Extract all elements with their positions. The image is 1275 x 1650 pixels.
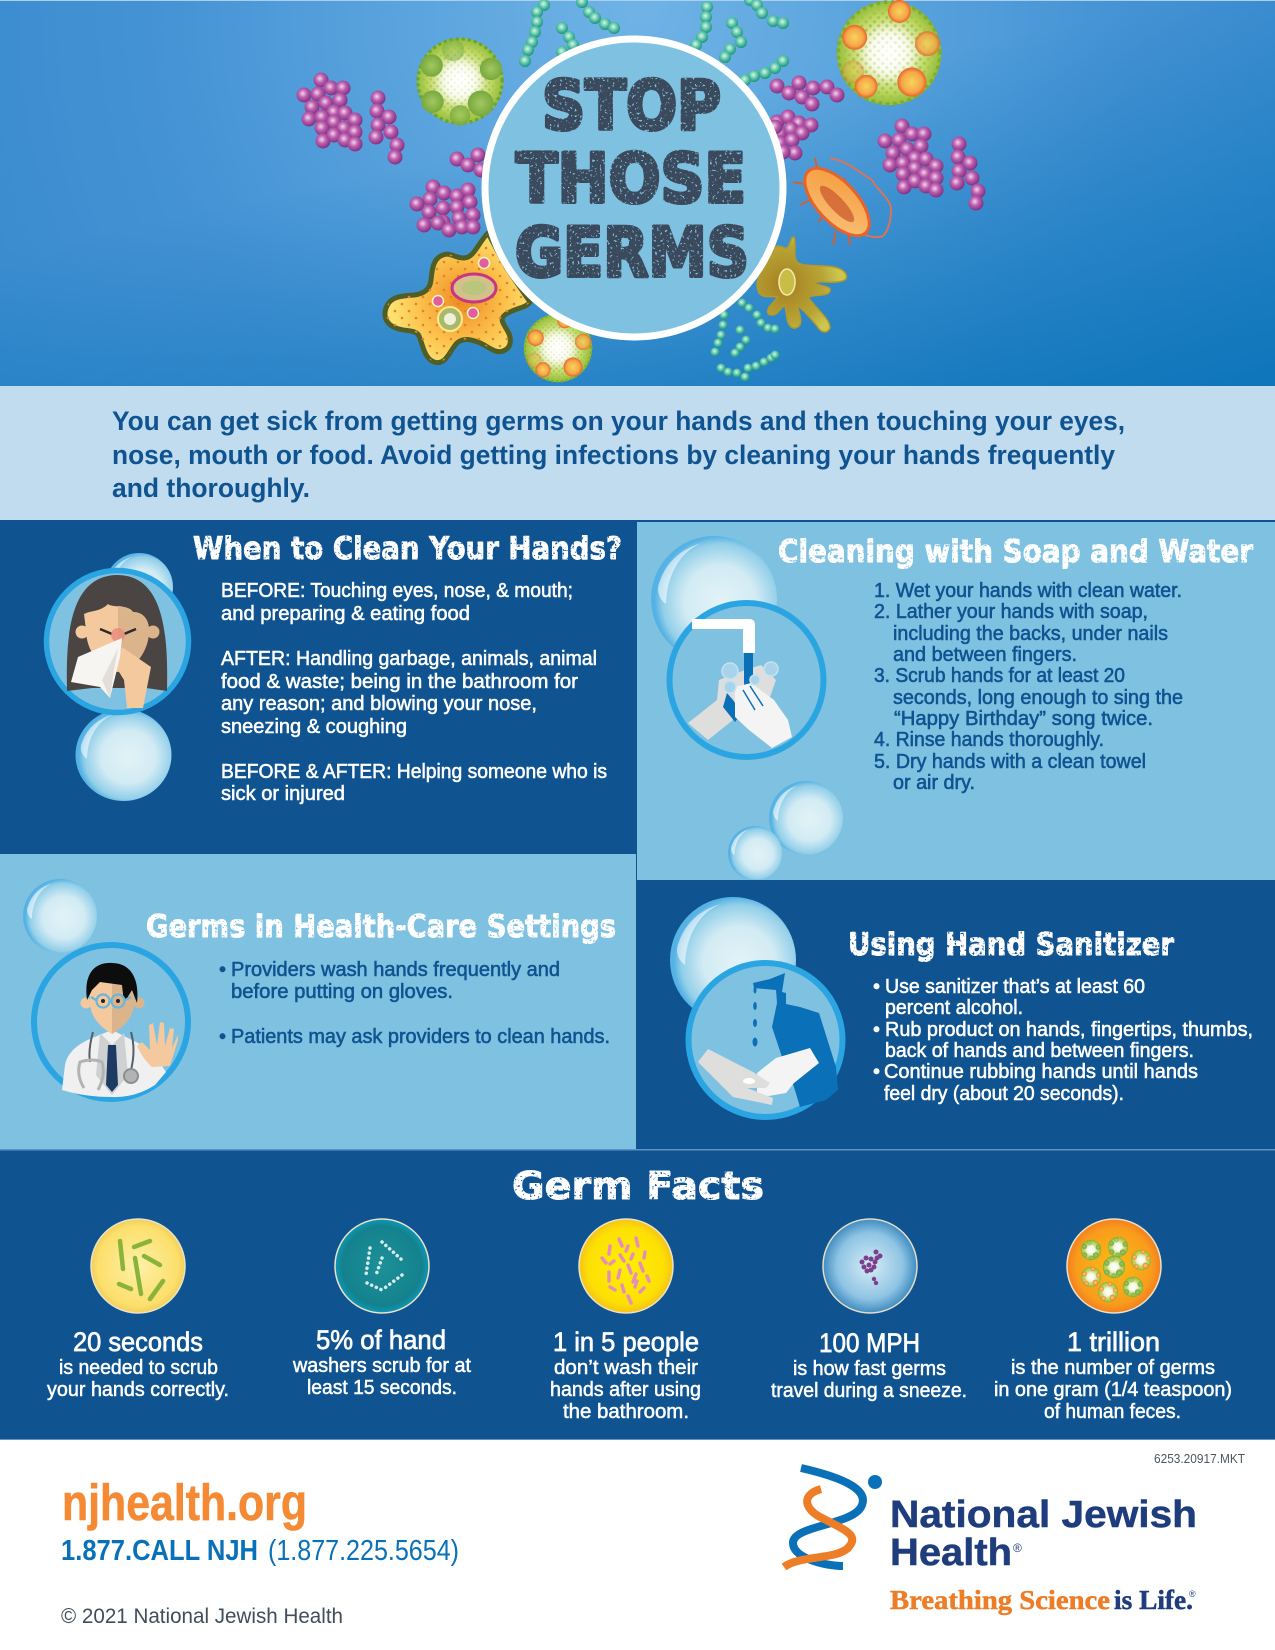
fact text: of human feces.	[1044, 1401, 1181, 1423]
germ: purple cocci clusters left and right	[296, 72, 986, 210]
text: when to clean: sneezing & coughing	[221, 716, 407, 738]
text: when to clean: AFTER: Handling garbage, animals, animal	[221, 648, 597, 670]
text: health-care bullets: •	[219, 959, 226, 981]
fact text: 20 seconds	[73, 1327, 203, 1357]
logo wordmark: ®	[1013, 1541, 1022, 1555]
text: health-care bullets: Providers wash hands frequently and	[231, 959, 560, 981]
icon: woman sneezing into tissue	[46, 570, 188, 712]
text: soap steps: 4. Rinse hands thoroughly.	[874, 729, 1104, 751]
petri dish: yellow with green rods	[91, 1219, 185, 1313]
text: soap steps: seconds, long enough to sing the	[893, 687, 1183, 709]
text: sanitizer bullets: Use sanitizer that’s at least 60	[885, 976, 1145, 998]
fact 5	[994, 1219, 1232, 1423]
title text: STOP	[542, 67, 721, 146]
germ: green virus sphere top left	[417, 38, 503, 126]
intro band	[0, 386, 1275, 521]
panel: germs in health-care settings	[0, 854, 636, 1150]
icon: doctor with stethoscope	[34, 945, 188, 1099]
text: soap steps: and between fingers.	[893, 644, 1077, 666]
text: health-care bullets: •	[219, 1026, 226, 1048]
fact text: the bathroom.	[563, 1401, 689, 1423]
text: when to clean: BEFORE & AFTER: Helping someone who is	[221, 761, 607, 783]
logo wordmark: Health	[890, 1532, 1012, 1574]
fact 4	[771, 1219, 967, 1402]
text: health-care bullets: Patients may ask providers to clean hands.	[231, 1026, 610, 1048]
germ: purple cocci cluster lower centre	[410, 148, 488, 238]
intro text	[112, 406, 1125, 503]
fact text: hands after using	[550, 1379, 701, 1401]
hero background	[0, 0, 1275, 386]
title text: THOSE	[516, 140, 746, 219]
heading: Germs in Health-Care Settings	[146, 909, 616, 945]
title badge	[485, 39, 783, 337]
soap bubbles	[651, 536, 843, 880]
petri dish: blue with purple cocci	[823, 1219, 917, 1313]
fact text: 100 MPH	[819, 1328, 920, 1358]
phone	[61, 1535, 459, 1567]
website: njhealth.org	[62, 1474, 307, 1531]
logo wordmark: National Jewish	[890, 1494, 1197, 1536]
panel: using hand sanitizer	[636, 881, 1275, 1150]
germ: green and orange sphere top right	[837, 0, 941, 105]
fact 3	[550, 1219, 701, 1423]
fact 1	[47, 1219, 229, 1401]
text: when to clean: sick or injured	[221, 783, 345, 805]
icon: hands under faucet	[670, 603, 824, 757]
text: sanitizer bullets: back of hands and between fingers.	[885, 1040, 1194, 1062]
fact text	[550, 1327, 701, 1423]
logo tagline	[890, 1585, 1196, 1615]
text: sanitizer bullets: •	[873, 1061, 880, 1083]
fact text: is how fast germs	[793, 1358, 946, 1380]
phone: (1.877.225.5654)	[268, 1535, 459, 1567]
text: soap steps: 1. Wet your hands with clean water.	[874, 580, 1182, 602]
fact text: travel during a sneeze.	[771, 1380, 967, 1402]
soap bubble	[23, 879, 97, 953]
fact text: washers scrub for at	[292, 1355, 471, 1377]
petri dish: teal with bead chains	[335, 1219, 429, 1313]
germ: olive amoeba nucleus	[779, 269, 795, 295]
title text	[515, 67, 749, 293]
soap bubbles	[76, 553, 173, 801]
text: sanitizer bullets: Continue rubbing hands until hands	[884, 1061, 1198, 1083]
intro text: nose, mouth or food. Avoid getting infections by cleaning your hands frequently	[112, 440, 1115, 470]
heading: When to Clean Your Hands?	[193, 531, 622, 567]
panel: germ facts	[0, 1149, 1275, 1440]
fact text: least 15 seconds.	[307, 1377, 457, 1399]
title text: GERMS	[515, 214, 749, 293]
germ: teal bead chains top	[519, 0, 789, 86]
germ: yellow amoeba	[385, 233, 530, 363]
text: sanitizer bullets: feel dry (about 20 seconds).	[884, 1083, 1124, 1105]
text: when to clean: any reason; and blowing your nose,	[221, 693, 537, 715]
fact text	[994, 1327, 1232, 1423]
petri dish: orange with green spheres	[1067, 1219, 1161, 1313]
soap bubble	[670, 897, 796, 1023]
text: when to clean	[221, 580, 607, 805]
fact text: is the number of germs	[1011, 1357, 1215, 1379]
text: soap steps: including the backs, under nails	[893, 623, 1168, 645]
fact text	[292, 1325, 471, 1399]
text: when to clean: BEFORE: Touching eyes, nose, & mouth;	[221, 580, 573, 602]
intro text: and thoroughly.	[112, 473, 310, 503]
germ: orange bacterium with flagellum	[793, 158, 891, 246]
germ: purple cocci cluster upper right	[768, 76, 844, 160]
copyright: © 2021 National Jewish Health	[61, 1605, 343, 1628]
text: sanitizer bullets: Rub product on hands, fingertips, thumbs,	[885, 1019, 1253, 1041]
heading: Germ Facts	[512, 1164, 764, 1208]
text: soap steps: 3. Scrub hands for at least 20	[874, 665, 1125, 687]
text: soap steps: “Happy Birthday” song twice.	[894, 708, 1153, 730]
text: health-care bullets: before putting on gloves.	[231, 981, 453, 1003]
logo tagline: is Life.	[1114, 1585, 1193, 1615]
fact text: don’t wash their	[554, 1357, 698, 1379]
text: health-care bullets	[219, 959, 610, 1048]
fact text: is needed to scrub	[59, 1357, 218, 1379]
document code: 6253.20917.MKT	[1154, 1451, 1245, 1466]
text: soap steps: 5. Dry hands with a clean towel	[874, 751, 1146, 773]
hero banner	[0, 0, 1275, 386]
fact text	[771, 1328, 967, 1402]
text: sanitizer bullets	[873, 976, 1253, 1105]
fact text	[47, 1327, 229, 1401]
germ: olive amoeba	[757, 237, 846, 332]
text: when to clean: and preparing & eating food	[221, 603, 470, 625]
footer	[0, 1440, 1275, 1650]
text: soap steps: 2. Lather your hands with soap,	[874, 601, 1148, 623]
text: sanitizer bullets: •	[873, 1019, 880, 1041]
petri dish: yellow with pink rods	[579, 1219, 673, 1313]
germ: green and orange sphere bottom	[524, 313, 592, 382]
panel: when to clean your hands	[0, 520, 637, 854]
fact text: your hands correctly.	[47, 1379, 229, 1401]
logo tagline: ®	[1189, 1589, 1196, 1599]
text: soap steps	[874, 580, 1183, 794]
fact text: 1 in 5 people	[553, 1327, 699, 1357]
text: sanitizer bullets: •	[873, 976, 880, 998]
text: soap steps: or air dry.	[893, 772, 975, 794]
fact text: 5% of hand	[316, 1325, 446, 1355]
heading: Using Hand Sanitizer	[848, 927, 1175, 963]
phone: 1.877.CALL NJH	[61, 1535, 258, 1567]
intro text: You can get sick from getting germs on your hands and then touching your eyes,	[112, 406, 1125, 436]
fact text: in one gram (1/4 teaspoon)	[994, 1379, 1232, 1401]
text: sanitizer bullets: percent alcohol.	[885, 997, 1023, 1019]
icon: sanitizer bottle over hands	[688, 963, 842, 1117]
logo tagline: Breathing Science	[890, 1585, 1110, 1615]
logo wordmark	[890, 1494, 1197, 1574]
fact text: 1 trillion	[1067, 1327, 1160, 1357]
logo mark: DNA figure	[784, 1468, 882, 1567]
panel: cleaning with soap and water	[635, 520, 1275, 881]
fact 2	[292, 1219, 471, 1399]
germ: teal bead chains bottom	[710, 298, 780, 382]
text: when to clean: food & waste; being in the bathroom for	[221, 671, 578, 693]
